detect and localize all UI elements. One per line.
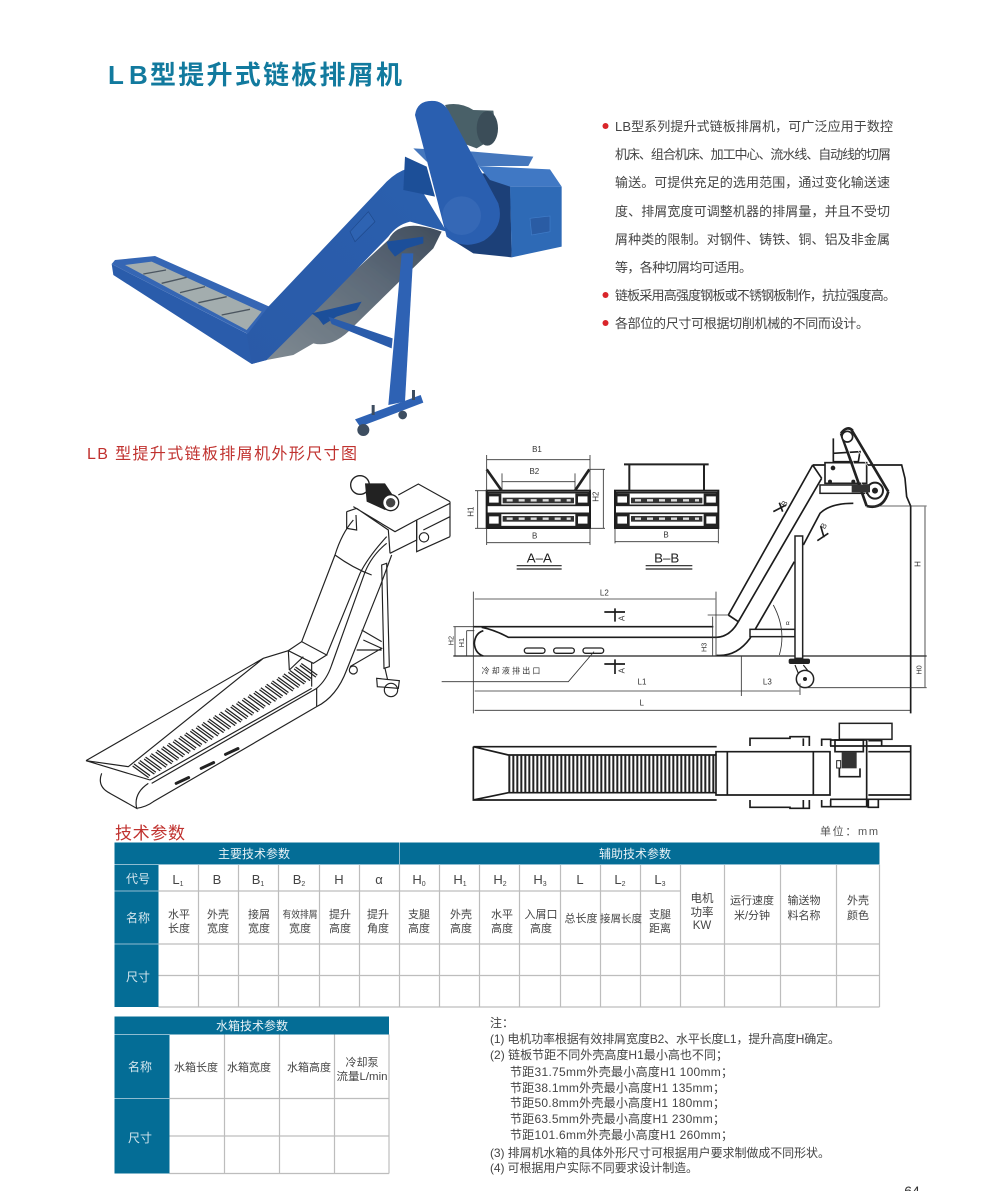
tank row labels: 尺寸 <box>128 1131 152 1145</box>
paragraph lines: 链板采用高强度钢板或不锈钢板制作，抗拉强度高。 <box>615 288 896 303</box>
parameter codes: H <box>412 872 422 887</box>
notes: 节距63.5mm外壳最小高度H1 230mm； <box>510 1111 725 1126</box>
plan: motor <box>835 740 863 777</box>
title: B <box>129 60 148 90</box>
support bracket <box>750 629 795 637</box>
motor <box>351 476 399 511</box>
dimension labels: L <box>639 699 644 708</box>
dimension labels: L2 <box>600 589 609 598</box>
tank row labels: 名称 <box>128 1059 152 1074</box>
A-A labels: B2 <box>529 467 540 476</box>
notes: 节距38.1mm外壳最小高度H1 135mm； <box>510 1080 725 1095</box>
parameter codes: 1 <box>463 881 467 888</box>
A-A labels: B <box>532 532 537 541</box>
parameter codes: 3 <box>543 881 547 888</box>
plan: roller details <box>868 741 882 807</box>
photo: grey underside of incline <box>267 226 442 360</box>
parameter names: KW <box>693 920 711 932</box>
dimension labels: H0 <box>914 665 923 675</box>
text block: product description <box>602 119 896 331</box>
photo: cross strut <box>328 317 393 348</box>
B-B section frame <box>615 491 718 528</box>
baseline <box>453 654 927 658</box>
parameter names: 提升 <box>367 908 389 921</box>
section marks A: A <box>618 667 627 673</box>
parameter codes: L <box>576 872 584 887</box>
photo: casters <box>357 390 415 436</box>
row labels <box>126 872 150 984</box>
A-A section frame <box>487 491 590 528</box>
tank side column <box>114 1034 170 1174</box>
photo: support leg <box>388 253 413 405</box>
parameter codes <box>172 872 666 888</box>
B-B caption: B–B <box>654 550 679 565</box>
coolant outlet leader: 冷却液排出口 <box>482 666 540 676</box>
cross section B-B <box>615 464 718 569</box>
group headers: 主要技术参数 <box>218 846 290 861</box>
photo: box top <box>413 148 533 166</box>
isometric line drawing <box>86 476 450 808</box>
photo: discharge box front <box>510 187 562 257</box>
parameter codes: 2 <box>503 881 507 888</box>
bullet 1 <box>602 123 608 129</box>
section marks B: B <box>779 499 790 508</box>
hopper <box>86 651 289 780</box>
conveyor rail <box>150 688 317 783</box>
caster <box>349 666 399 697</box>
table header bar <box>114 842 880 864</box>
tank column names <box>174 1056 388 1083</box>
parameter names: 接屑长度 <box>600 912 642 925</box>
parameter names: 总长度 <box>564 911 598 925</box>
parameter codes: H <box>453 872 463 887</box>
photo: tray rim <box>112 256 269 335</box>
B-B dimensions <box>615 528 718 543</box>
auxiliary group header: 辅助技术参数 <box>599 846 671 861</box>
photo: upper bracket <box>387 237 423 257</box>
parameter names: 提升 <box>329 908 351 921</box>
table: main parameters <box>114 842 880 1007</box>
paragraph lines: LB型系列提升式链板排屑机，可广泛应用于数控 <box>615 119 893 134</box>
paragraph lines: 度、排屑宽度可调整机器的排屑量，并且不受切 <box>615 204 890 219</box>
chain slats <box>133 664 317 777</box>
parameter names: 高度 <box>329 921 351 935</box>
row labels: 代号 <box>126 872 150 886</box>
support leg <box>795 536 803 658</box>
rising chute <box>302 520 387 655</box>
photo: plate seams <box>143 270 250 315</box>
parameter names: 接屑 <box>248 908 270 921</box>
photo: motor <box>445 104 498 148</box>
photo: blue chip conveyor <box>112 101 562 436</box>
photo: pulley cover <box>442 196 481 235</box>
tray body <box>473 622 738 656</box>
B-B label: B <box>663 531 669 540</box>
parameter codes: B <box>293 872 301 887</box>
parameter codes: α <box>375 872 383 887</box>
parameter codes: H <box>493 872 503 887</box>
parameter names: 支腿 <box>408 908 430 921</box>
parameter names: 宽度 <box>289 921 311 935</box>
tail end cap <box>100 707 317 808</box>
A-A labels <box>466 445 601 541</box>
parameter names: 颜色 <box>847 908 869 922</box>
parameter names: 外壳 <box>450 907 472 921</box>
photo: access plate <box>350 212 375 242</box>
photo: incline front face <box>247 168 447 364</box>
parameter names: 高度 <box>530 921 552 935</box>
dimension labels: L3 <box>763 677 772 686</box>
tank header: 水箱技术参数 <box>216 1018 288 1033</box>
parameter codes: H <box>334 872 344 887</box>
parameter codes: 0 <box>422 881 426 888</box>
plan view drawing <box>473 723 911 808</box>
rising chute inner rails <box>317 543 392 707</box>
dimension labels <box>446 561 923 708</box>
A-A hopper walls <box>487 469 589 491</box>
tank column names: 水箱高度 <box>287 1060 331 1074</box>
notes: (3) 排屑机水箱的具体外形尺寸可根据用户要求制做成不同形状。 <box>490 1145 830 1160</box>
parameter names: 入屑口 <box>524 908 558 921</box>
bullet 2 <box>602 292 608 298</box>
photo: belt guard <box>415 101 500 245</box>
parameter codes: B <box>213 872 221 887</box>
top frame <box>347 507 417 553</box>
parameter names: 角度 <box>367 921 389 935</box>
photo: lower bracket <box>312 302 362 325</box>
plan: chain slats <box>508 717 716 830</box>
dimension labels: α <box>786 620 790 627</box>
notes: 节距50.8mm外壳最小高度H1 180mm； <box>510 1095 725 1110</box>
section marks B <box>773 499 829 541</box>
parameter names: 水平 <box>168 908 190 921</box>
parameter names: 宽度 <box>207 921 229 935</box>
parameter names: 支腿 <box>649 908 671 921</box>
parameter codes: 1 <box>180 881 184 888</box>
parameter codes: 2 <box>301 881 305 888</box>
parameter names: 长度 <box>168 921 190 935</box>
dimension labels: H1 <box>457 638 466 647</box>
dimension lines <box>453 506 927 713</box>
section marks A <box>604 608 627 674</box>
parameter names: 米/分钟 <box>734 908 770 922</box>
side elevation drawing <box>442 428 927 713</box>
photo: box window <box>530 216 550 235</box>
drive head <box>820 428 888 507</box>
paragraph lines: 等，各种切屑均可适用。 <box>615 260 752 275</box>
parameter names: 距离 <box>649 921 671 935</box>
photo: head bracket <box>403 157 435 197</box>
table side column <box>114 864 158 1007</box>
photo: tray side <box>112 264 270 364</box>
B-B lower chain <box>617 513 717 527</box>
notes: 节距101.6mm外壳最小高度H1 260mm； <box>510 1127 733 1142</box>
paragraph lines: 机床、组合机床、加工中心、流水线、自动线的切屑 <box>615 147 891 162</box>
tank column names: 冷却泵 <box>346 1056 378 1069</box>
discharge box <box>398 484 450 552</box>
parameter names: 电机 <box>690 891 714 905</box>
heading: outline dimension drawing: LB 型提升式链板排屑机外形尺寸图 <box>87 445 357 463</box>
rising chute <box>728 465 822 622</box>
parameter names: 运行速度 <box>730 893 774 907</box>
parameter codes: L <box>654 872 662 887</box>
row labels: 尺寸 <box>126 970 150 984</box>
A-A labels: H1 <box>466 506 475 517</box>
tank column names: 水箱宽度 <box>227 1060 271 1074</box>
unit note: 单位：mm <box>820 824 878 838</box>
drain slots <box>174 747 240 785</box>
paragraph lines: 输送。可提供充足的选用范围，通过变化输送速 <box>615 175 890 190</box>
plan: discharge outline <box>830 740 911 807</box>
caster <box>789 659 814 688</box>
photo: caster base <box>355 395 423 427</box>
parameter codes: H <box>533 872 543 887</box>
parameter names: 有效排屑 <box>282 908 318 921</box>
photo: discharge box sloped top <box>478 166 562 187</box>
photo: dark drive side <box>433 173 512 257</box>
title: L <box>108 60 124 90</box>
notes: (1) 电机功率根据有效排屑宽度B2、水平长度L1，提升高度H确定。 <box>490 1031 840 1046</box>
drain slots <box>524 648 604 653</box>
tank header bar <box>114 1016 389 1034</box>
tank grid <box>170 1034 389 1174</box>
support leg <box>382 563 389 680</box>
paragraph lines: 各部位的尺寸可根据切削机械的不同而设计。 <box>615 316 869 331</box>
parameter names: 水平 <box>491 908 513 921</box>
dimension labels: H3 <box>700 643 709 652</box>
plan: tray outline <box>473 747 717 800</box>
notes <box>490 1015 840 1175</box>
grid lines <box>158 864 880 1007</box>
A-A dimensions <box>475 455 605 545</box>
parameter codes: B <box>252 872 260 887</box>
parameter codes: 2 <box>622 881 626 888</box>
hood transition <box>288 642 327 687</box>
plan: side brackets <box>750 737 831 808</box>
parameter codes: 1 <box>260 881 264 888</box>
parameter names: 高度 <box>408 921 430 935</box>
section marks B: B <box>819 522 829 531</box>
parameter codes: L <box>172 872 180 887</box>
paragraph lines <box>615 119 896 331</box>
B-B top box <box>624 464 709 492</box>
notes: 节距31.75mm外壳最小高度H1 100mm； <box>510 1064 733 1079</box>
notes: 注： <box>490 1015 514 1030</box>
B-B upper chain <box>617 493 717 505</box>
parameter names: 料名称 <box>788 908 820 922</box>
dimension labels: H2 <box>446 636 455 645</box>
chute underside and hood <box>717 465 911 713</box>
parameter names: 外壳 <box>847 893 869 907</box>
tank column names: 流量L/min <box>336 1069 388 1083</box>
notes: (2) 链板节距不同外壳高度H1最小高也不同； <box>490 1047 728 1062</box>
A-A labels: B1 <box>532 445 542 454</box>
parameter names: 高度 <box>491 921 513 935</box>
dimension labels: H <box>914 561 923 567</box>
photo: mesh chain plates <box>125 262 262 330</box>
paragraph lines: 屑种类的限制。对钢件、铸铁、铜、铝及非金属 <box>615 232 890 247</box>
notes: (4) 可根据用户实际不同要求设计制造。 <box>490 1160 698 1175</box>
parameter codes: 3 <box>662 881 666 888</box>
parameter names: 宽度 <box>248 921 270 935</box>
A-A upper chain <box>488 493 588 505</box>
A-A caption: A–A <box>527 550 552 565</box>
parameter names: 功率 <box>690 905 714 919</box>
coolant outlet leader <box>442 652 594 682</box>
cross brace <box>350 630 382 667</box>
tank row labels <box>128 1059 152 1145</box>
dimension labels: L1 <box>638 677 647 686</box>
A-A labels: H2 <box>592 491 601 502</box>
A-A lower chain <box>488 513 588 527</box>
bullet 3 <box>602 320 608 326</box>
plan: motor cover <box>839 723 892 739</box>
heading: technical parameters: 技术参数 <box>115 824 185 843</box>
parameter codes: L <box>614 872 622 887</box>
parameter names: 高度 <box>450 921 472 935</box>
plan: chute <box>716 752 830 795</box>
title: 型提升式链板排屑机 <box>150 60 402 90</box>
parameter names: 外壳 <box>207 907 229 921</box>
parameter names <box>168 891 869 935</box>
section marks A: A <box>618 615 627 621</box>
parameter names: 输送物 <box>788 893 820 907</box>
table: water tank parameters <box>114 1016 389 1174</box>
row labels: 名称 <box>126 910 150 925</box>
tank column names: 水箱长度 <box>174 1060 218 1074</box>
cross section A-A <box>466 445 605 569</box>
